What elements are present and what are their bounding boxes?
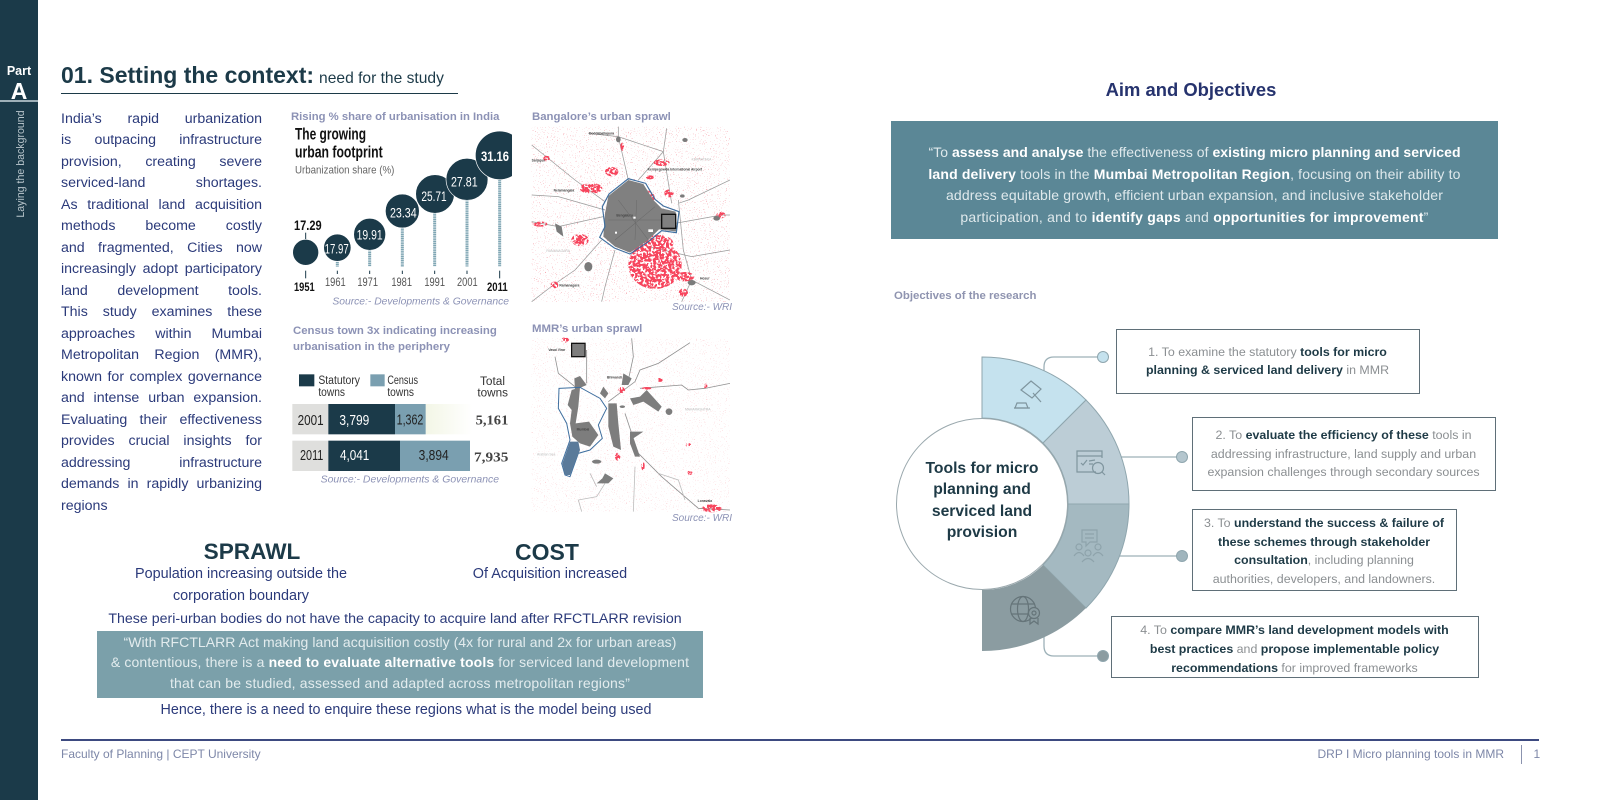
objective box 2: addressing infrastructure, land supply and urban <box>1211 446 1476 460</box>
objective box 4: recommendations for improved frameworks <box>1171 660 1418 674</box>
sprawl description: Population increasing outside the <box>135 566 347 582</box>
map: Bangalore urban sprawl: Bengaluru <box>616 214 633 218</box>
diagram: semicircle of tools with connectors <box>896 351 1188 662</box>
chart: urban footprint lollipop: 25.71 <box>421 188 447 204</box>
sidebar letter: A: A <box>11 78 27 104</box>
chart: statutory and census towns bars <box>292 373 508 486</box>
objective box 1: planning & serviced land delivery in MMR <box>1146 363 1389 377</box>
map: Bangalore urban sprawl: Ramanagara <box>559 283 579 287</box>
segment 4 <box>982 565 1086 651</box>
title: 01. Setting the context: need for the study <box>61 62 444 88</box>
source: WRI MMR: Source:- WRI <box>672 513 732 524</box>
heading: objectives of the research: Objectives of the research <box>894 290 1036 302</box>
panel: quote on alternative tools: that can be studied, assessed and adapted across metropolitan regions” <box>170 675 630 691</box>
chart: urban footprint lollipop: 1981 <box>391 276 412 289</box>
map: MMR urban sprawl: MAHARASHTRA <box>685 407 711 411</box>
intro text block: provision, creating severe <box>61 154 262 170</box>
intro text block: increasingly adopt participatory <box>61 261 262 277</box>
map: MMR urban sprawl: Vasai Virar <box>548 348 566 352</box>
chart: statutory and census towns bars: 3,894 <box>419 448 449 464</box>
objective box 2 <box>1192 417 1496 491</box>
map: Bangalore urban sprawl: Kempegowda International Airport <box>648 168 703 172</box>
cost heading: COST <box>515 539 579 565</box>
chart: statutory and census towns bars: Total <box>480 374 505 388</box>
chart: statutory and census towns bars: 7,935 <box>474 451 508 466</box>
intro text block: approaches within Mumbai <box>61 326 262 342</box>
sidebar: part A <box>0 0 38 800</box>
objective box 3: authorities, developers, and landowners. <box>1213 572 1435 586</box>
chart: urban footprint lollipop: The growing <box>295 124 366 143</box>
map: MMR urban sprawl: Mumbai <box>577 428 589 432</box>
chart: statutory and census towns bars: 5,161 <box>476 413 508 428</box>
chart: urban footprint lollipop: 19.91 <box>357 226 383 242</box>
map: Bangalore urban sprawl: RAMANAGARA <box>546 249 571 253</box>
map: Bangalore urban sprawl: Nelamangala <box>554 188 574 192</box>
segment 3 <box>1043 504 1129 608</box>
heading: census town chart <box>293 325 497 353</box>
chart: statutory and census towns bars: Statutory <box>318 373 361 387</box>
heading: census town chart: Census town 3x indicating increasing <box>293 325 497 337</box>
chart: statutory and census towns bars: towns <box>318 385 345 399</box>
center circle <box>896 418 1068 590</box>
callout: sprawl <box>135 539 347 604</box>
map: Bangalore urban sprawl: Sarjapur <box>532 158 546 162</box>
chart: urban footprint lollipop: 1951 <box>294 280 315 294</box>
center label: tools for micro planning: serviced land <box>932 503 1032 520</box>
intro text block: methods become costly <box>61 218 262 234</box>
icon: people discussion <box>1074 530 1103 562</box>
panel: quote on alternative tools <box>97 631 703 698</box>
intro text block: known for complex governance <box>61 369 262 385</box>
panel: aim statement <box>891 121 1498 239</box>
map: Bangalore urban sprawl: Hosur <box>700 276 710 280</box>
intro text block: regions <box>61 498 108 514</box>
chart: urban footprint lollipop: 17.29 <box>294 217 322 233</box>
chart: urban footprint lollipop: Urbanization share (%) <box>295 164 395 176</box>
intro text block: serviced-land shortages. <box>61 175 262 191</box>
objective box 4 <box>1111 616 1479 678</box>
objective box 4: 4. To compare MMR’s land development models with <box>1140 622 1449 636</box>
source: WRI Bangalore: Source:- WRI <box>672 302 732 313</box>
sidebar label: Part: Part <box>7 64 31 78</box>
segment 1 <box>982 357 1086 443</box>
callout: cost <box>473 539 627 582</box>
footer: document title: DRP I Micro planning tools in MMR <box>1317 747 1504 761</box>
center label: tools for micro planning: Tools for micro <box>925 460 1038 477</box>
chart: urban footprint lollipop: Source:- Developments & Governance <box>332 296 510 307</box>
chart: urban footprint lollipop: 27.81 <box>451 174 478 190</box>
objective box 2: 2. To evaluate the efficiency of these tools in <box>1216 428 1471 442</box>
objective box 3 <box>1192 509 1457 591</box>
chart: statutory and census towns bars: 3,799 <box>339 413 369 429</box>
intro text block <box>61 111 262 514</box>
text: need to enquire: Hence, there is a need to enquire these regions what is the model being used <box>161 702 651 718</box>
sprawl heading: SPRAWL <box>204 539 300 564</box>
icon: checklist magnifier <box>1077 451 1105 475</box>
heading: Aim and Objectives: Aim and Objectives <box>1106 79 1276 100</box>
heading: Bangalore map: Bangalore’s urban sprawl <box>532 111 671 123</box>
panel: quote on alternative tools: & contentious, there is a need to evaluate alternative tools for serviced land development <box>111 654 689 670</box>
chart: statutory and census towns bars: 1,362 <box>397 412 423 428</box>
map: MMR urban sprawl <box>532 338 730 512</box>
cost description: Of Acquisition increased <box>473 566 627 582</box>
panel: aim statement: “To assess and analyse the effectiveness of existing micro planning and serviced <box>928 144 1461 160</box>
intro text block: As traditional land acquisition <box>61 197 262 213</box>
chart: statutory and census towns bars: 2001 <box>298 413 324 429</box>
heading: urbanisation chart: Rising % share of urbanisation in India <box>291 111 499 123</box>
panel: aim statement: participation, and to identify gaps and opportunities for improvement” <box>960 209 1429 225</box>
center label: tools for micro planning <box>925 460 1038 541</box>
intro text block: addressing infrastructure <box>61 455 262 471</box>
chart: statutory and census towns bars: towns <box>387 385 414 399</box>
sprawl description: corporation boundary <box>173 588 309 604</box>
footer: institution: Faculty of Planning | CEPT University <box>61 747 261 761</box>
map: Bangalore urban sprawl <box>532 126 730 302</box>
chart: urban footprint lollipop: urban footprint <box>295 143 383 162</box>
objective box 3: these schemes through stakeholder <box>1218 534 1430 548</box>
chart: urban footprint lollipop: 1991 <box>424 276 445 289</box>
objective box 3: consultation, including planning <box>1234 552 1414 566</box>
objective box 1 <box>1116 329 1420 394</box>
sprawl description <box>135 566 347 604</box>
chart: statutory and census towns bars: 2011 <box>300 448 323 464</box>
chart: urban footprint lollipop: 17.97 <box>325 240 349 256</box>
heading: MMR map: MMR’s urban sprawl <box>532 323 642 335</box>
icon: globe certificate <box>1010 596 1040 624</box>
map: MMR urban sprawl: Arabian Sea <box>537 452 555 456</box>
panel: aim statement: land delivery tools in the Mumbai Metropolitan Region, focusing on their ability to <box>928 166 1461 182</box>
map: Bangalore urban sprawl: KARNATAKA <box>692 158 712 162</box>
intro text block: land development tools. <box>61 283 262 299</box>
icon: gavel <box>1014 381 1041 408</box>
panel: quote on alternative tools: “With RFCTLARR Act making land acquisition costly (4x for rural and 2x for urban areas) <box>124 634 676 650</box>
intro text block: demands in rapidly urbanizing <box>61 476 262 492</box>
intro text block: India’s rapid urbanization <box>61 111 262 127</box>
footer: page number: 1 <box>1534 747 1540 761</box>
objective box 1: 1. To examine the statutory tools for micro <box>1148 344 1387 358</box>
panel: aim statement: address equitable growth, efficient urban expansion, and inclusive stakeholder <box>946 187 1443 203</box>
objective box 3: 3. To understand the success & failure of <box>1204 516 1444 530</box>
intro text block: provides crucial insights for <box>61 433 262 449</box>
map: MMR urban sprawl: Bhiwandi <box>607 375 622 379</box>
intro text block: This study examines these <box>61 304 262 320</box>
chart: urban footprint lollipop <box>293 124 512 307</box>
intro text block: and fragmented, Cities now <box>61 240 262 256</box>
objective box 4: best practices and propose implementable policy <box>1150 642 1439 656</box>
center label: tools for micro planning: planning and <box>933 481 1031 498</box>
intro text block: and intense urban expansion. <box>61 390 262 406</box>
intro text block: Evaluating their effectiveness <box>61 412 262 428</box>
connector dots <box>1098 352 1188 662</box>
center label: tools for micro planning: provision <box>947 524 1017 541</box>
chart: statutory and census towns bars: Source:- Developments & Governance <box>321 475 500 486</box>
map: MMR urban sprawl: Lonavala <box>698 499 712 503</box>
sidebar rotated caption: Laying the background <box>15 110 27 218</box>
text: peri-urban capacity: These peri-urban bodies do not have the capacity to acquire land after RFCTLARR revision <box>108 611 682 627</box>
intro text block: Metropolitan Region (MMR), <box>61 347 262 363</box>
chart: statutory and census towns bars: towns <box>477 386 508 400</box>
chart: urban footprint lollipop: 1961 <box>325 276 346 289</box>
chart: statutory and census towns bars: Census <box>387 373 418 387</box>
chart: urban footprint lollipop: 23.34 <box>390 204 417 220</box>
heading: census town chart: urbanisation in the periphery <box>293 341 450 353</box>
chart: urban footprint lollipop: 2001 <box>457 276 478 289</box>
chart: statutory and census towns bars: 4,041 <box>340 448 369 464</box>
segment 2 <box>1043 400 1129 504</box>
objective box 2: expansion challenges through secondary sources <box>1207 465 1480 479</box>
chart: urban footprint lollipop: 1971 <box>357 276 378 289</box>
map: Bangalore urban sprawl: Doddaballapura <box>589 132 614 136</box>
intro text block: is outpacing infrastructure <box>61 132 262 148</box>
